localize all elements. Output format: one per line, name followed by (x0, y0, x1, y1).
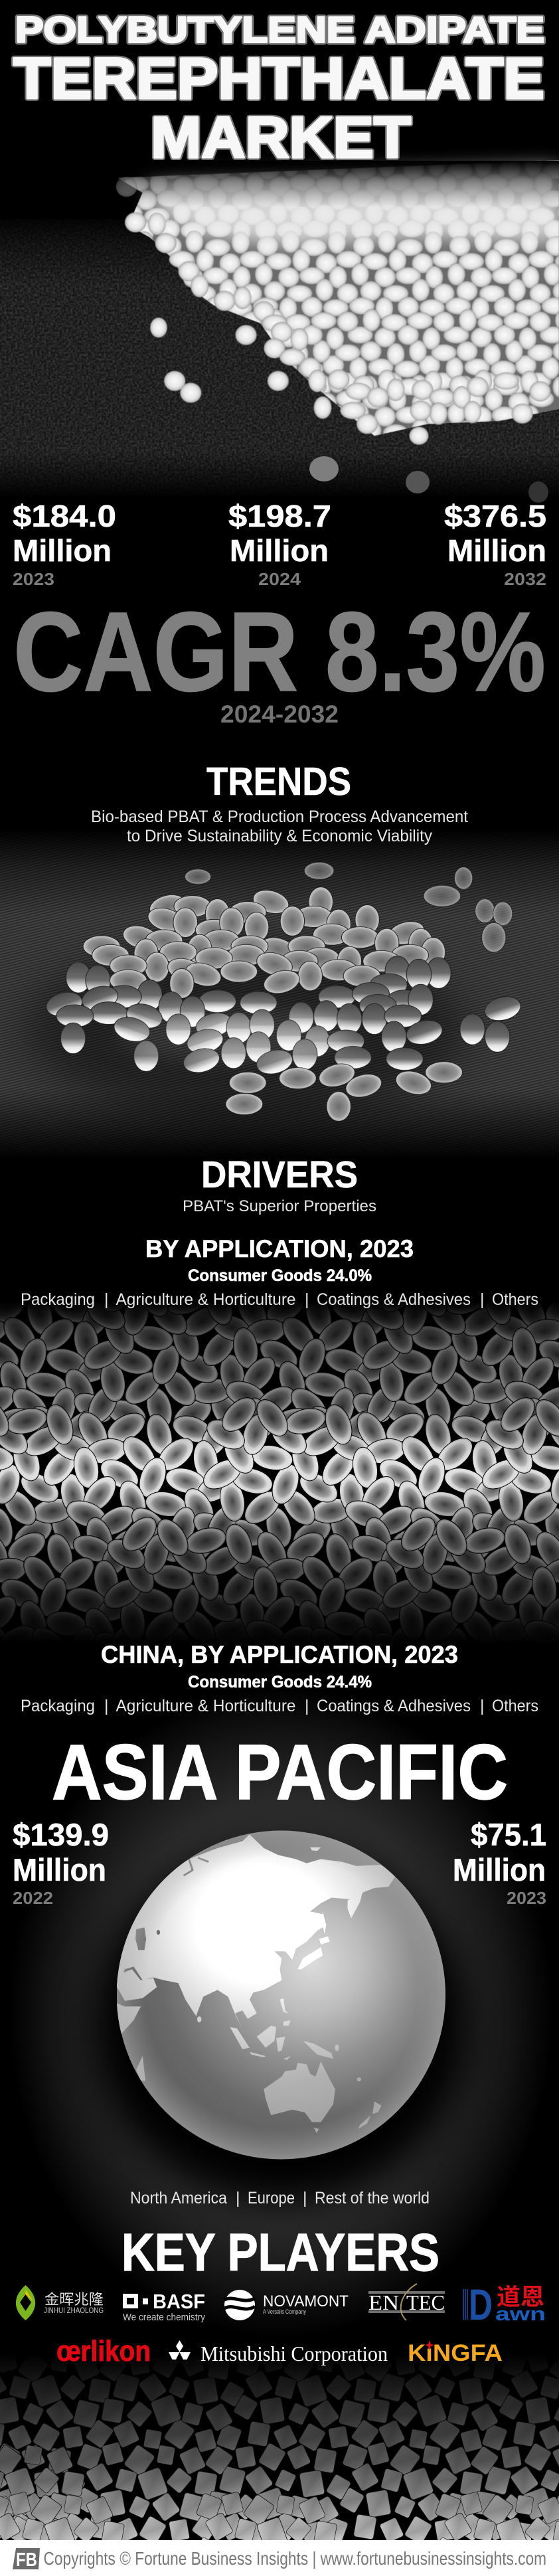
consumer goods share: Consumer Goods 24.0% (188, 1266, 372, 1285)
logo: Entec: EN (368, 2290, 399, 2314)
trends description: Bio-based PBAT & Production Process Advancement (91, 808, 468, 826)
textured dark surface (0, 213, 559, 498)
Asia Pacific stat: 2023 (453, 1817, 546, 1908)
other regions list: Europe (248, 2189, 295, 2207)
logo: Jinhui Zhaolong (16, 2285, 104, 2320)
logo: Novamont: A Versalis Company (263, 2308, 306, 2315)
logo: Mitsubishi Corporation: Mitsubishi Corporation (200, 2342, 388, 2365)
China consumer goods share: Consumer Goods 24.4% (188, 1673, 372, 1691)
salt-like crystals photo (0, 2363, 559, 2540)
dim stray pellets (309, 456, 548, 503)
title line 2: TEREPHTHALATE (13, 46, 544, 111)
pellet pile (116, 153, 559, 446)
application segments list: Others (492, 1290, 538, 1309)
market size stat: 2032: $376.5 (444, 499, 546, 533)
logo: BASF (123, 2290, 205, 2323)
market size stat: 2023: $184.0 (13, 499, 116, 533)
trends description: to Drive Sustainability & Economic Viability (127, 827, 432, 845)
market size stat: 2024: Million (230, 533, 329, 568)
logo: Dawn: D (469, 2280, 493, 2329)
logo: Novamont: NOVAMONT (263, 2292, 349, 2310)
other regions list: Rest of the world (315, 2189, 430, 2207)
CAGR figure: 2024-2032 (220, 701, 339, 728)
Asia Pacific stat: 2022 (13, 1817, 109, 1908)
application segments list (21, 1290, 538, 1309)
market size stat: 2024: $198.7 (228, 499, 331, 533)
title line 3: MARKET (151, 106, 411, 170)
logo: Dawn: 道恩 (497, 2284, 544, 2310)
trends description (91, 808, 468, 845)
market size stat: 2024: 2024 (258, 569, 301, 589)
China application segments list: | (305, 1697, 309, 1715)
other regions list: | (236, 2189, 240, 2207)
logo: Dawn (463, 2280, 546, 2329)
trends photo: pellets on cloth (0, 829, 559, 1159)
application segments list: Coatings & Adhesives (317, 1290, 471, 1309)
Asia Pacific stat: 2022: 2022 (13, 1888, 53, 1908)
logo: Jinhui Zhaolong: JINHUI ZHAOLONG (44, 2306, 104, 2315)
cloth background (0, 829, 559, 1159)
globe halo (9, 1687, 553, 2338)
application segments list: Agriculture & Horticulture (116, 1290, 296, 1309)
China application segments list: Packaging (21, 1697, 95, 1715)
China application segments list: Others (492, 1697, 538, 1715)
Asia Pacific stat: 2023: 2023 (507, 1888, 546, 1908)
key players heading: KEY PLAYERS (121, 2223, 439, 2282)
title line 1: POLYBUTYLENE ADIPATE (15, 9, 544, 50)
footer bar (0, 2540, 559, 2576)
drivers description: PBAT's Superior Properties (183, 1197, 376, 1215)
market size stat: 2023 (13, 499, 116, 589)
China application segments list: | (480, 1697, 485, 1715)
Asia Pacific stat: 2022: $139.9 (13, 1817, 109, 1852)
top fade (0, 161, 559, 207)
application segments list: | (480, 1290, 485, 1309)
China application segments list (21, 1697, 538, 1715)
market size stat: 2023: 2023 (13, 569, 54, 589)
drivers heading: DRIVERS (201, 1154, 358, 1196)
land masses (100, 1834, 396, 2133)
logo: Jinhui Zhaolong: 金晖兆隆 (44, 2291, 104, 2308)
hero image: white pellets (0, 153, 559, 503)
other regions list: | (303, 2189, 307, 2207)
Asia Pacific heading: ASIA PACIFIC (52, 1729, 508, 1816)
China application segments list: Coatings & Adhesives (317, 1697, 471, 1715)
logo: Oerlikon: œrlikon (56, 2335, 151, 2367)
market size stat: 2032: Million (447, 533, 546, 568)
application segments list: Packaging (21, 1290, 95, 1309)
Asia Pacific stat: 2022: Million (13, 1852, 106, 1887)
Asia Pacific stat: 2023: Million (453, 1852, 546, 1887)
icon: Fortune Business Insights logo: FB (16, 2549, 37, 2571)
title line 3: MARKET (151, 106, 411, 170)
China application segments list: | (104, 1697, 109, 1715)
logo: Entec (368, 2284, 445, 2320)
other regions list: North America (130, 2189, 227, 2207)
title line 1: POLYBUTYLENE ADIPATE (15, 9, 544, 50)
logo: Novamont (224, 2290, 349, 2320)
market size stat: 2023: Million (13, 533, 112, 568)
title line 2: TEREPHTHALATE (13, 46, 544, 111)
title (13, 9, 544, 170)
Asia Pacific stat: 2023: $75.1 (471, 1817, 546, 1852)
by application heading: BY APPLICATION, 2023 (145, 1235, 414, 1262)
China application segments list: Agriculture & Horticulture (116, 1697, 296, 1715)
application segments list: | (305, 1290, 309, 1309)
market size stat: 2024 (228, 499, 331, 589)
logo: BASF: BASF (153, 2290, 205, 2313)
market size stat: 2032 (444, 499, 546, 589)
China application heading: CHINA, BY APPLICATION, 2023 (101, 1641, 458, 1668)
trends heading: TRENDS (206, 760, 351, 804)
market size stat: 2032: 2032 (504, 569, 546, 589)
logo: BASF: We create chemistry (123, 2312, 205, 2323)
other regions list (130, 2189, 430, 2207)
pellet pile (25, 862, 525, 1121)
logo: Dawn: awn (495, 2304, 546, 2325)
icon: globe (100, 1830, 445, 2160)
logo: Kingfa: KiNGFA (408, 2340, 503, 2366)
application segments list: | (104, 1290, 109, 1309)
close-up pellets photo (0, 1304, 559, 1636)
logo: Entec: TEC (406, 2290, 445, 2314)
